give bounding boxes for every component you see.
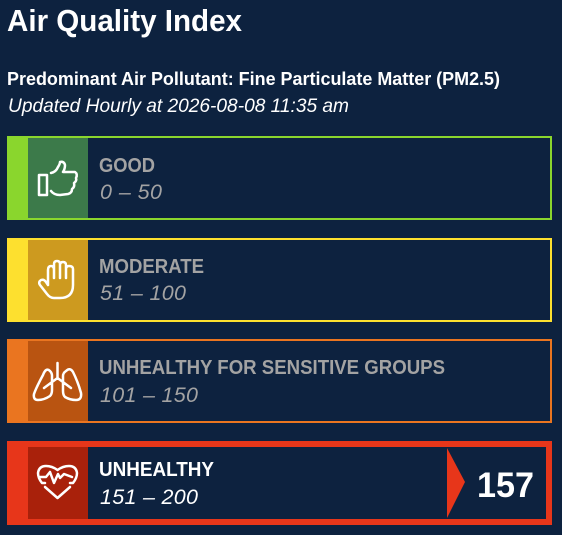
- current value: 157: [477, 466, 534, 505]
- panel: good: [7, 136, 551, 220]
- icon: raised hand: [39, 261, 73, 298]
- panel: unhealthy (current): [7, 441, 549, 525]
- label: good: GOOD: [99, 155, 155, 177]
- panel: unhealthy for sensitive groups: [7, 339, 551, 423]
- range: unhealthy for sensitive groups: 101 – 150: [100, 383, 198, 407]
- icon: lungs: [34, 363, 81, 400]
- panel: moderate: [7, 238, 551, 322]
- icon: thumbs up: [39, 162, 77, 195]
- arrow pointer: [447, 448, 465, 518]
- updated time line: Updated Hourly at 2026-08-08 11:35 am: [8, 96, 349, 117]
- range: good: 0 – 50: [100, 180, 162, 204]
- label: moderate: MODERATE: [99, 256, 204, 278]
- icon: heart with pulse: [38, 466, 77, 498]
- label: unhealthy: UNHEALTHY: [99, 459, 215, 481]
- range: moderate: 51 – 100: [100, 281, 186, 305]
- range: unhealthy: 151 – 200: [100, 485, 198, 509]
- label: unhealthy for sensitive groups: UNHEALTHY FOR SENSITIVE GROUPS: [99, 357, 445, 379]
- title: Air Quality Index: [7, 4, 242, 38]
- predominant pollutant line: Predominant Air Pollutant: Fine Particulate Matter (PM2.5): [7, 68, 500, 89]
